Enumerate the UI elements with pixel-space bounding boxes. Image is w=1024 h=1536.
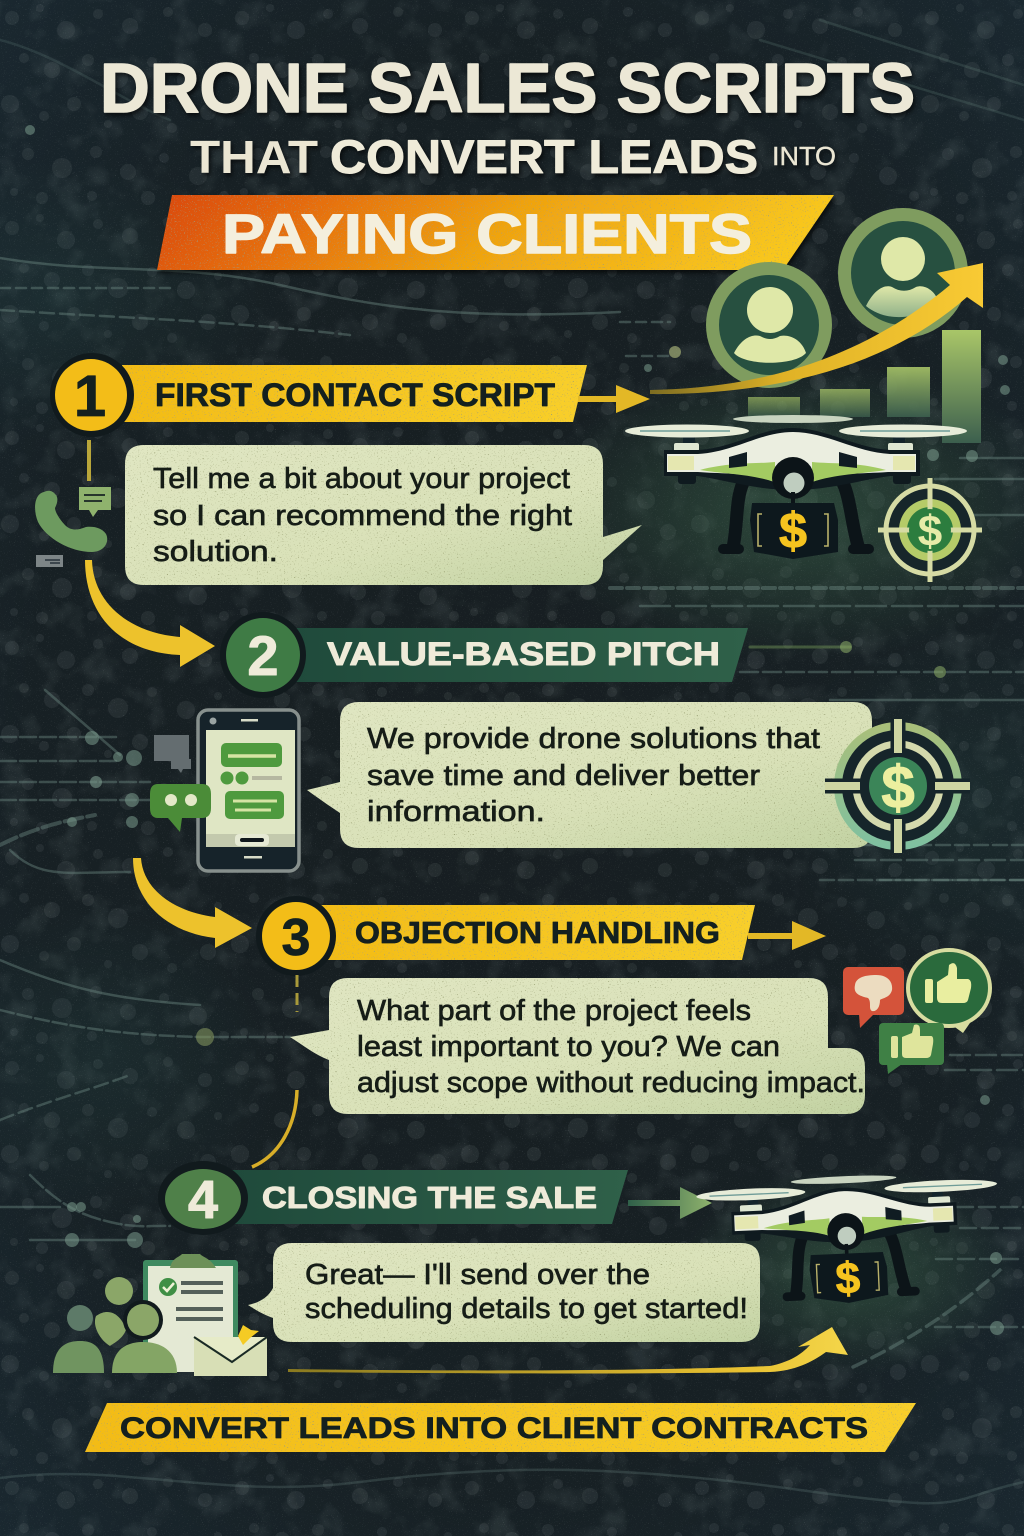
arrow: to client contracts bbox=[288, 1327, 848, 1374]
icon: thumbs up circle bbox=[908, 950, 990, 1033]
step 4 bbox=[158, 1161, 760, 1342]
icon: drone with dollar package bbox=[625, 415, 967, 559]
step 3 banner: OBJECTION HANDLING bbox=[355, 915, 720, 950]
step 3 banner bbox=[318, 905, 755, 960]
arrow: step 3 right bbox=[748, 921, 826, 950]
script bubble 4: scheduling details to get started! bbox=[305, 1293, 748, 1325]
title banner: paying clients: PAYING CLIENTS bbox=[222, 202, 752, 265]
icon: dollar target: $ bbox=[918, 507, 942, 556]
step 4 number badge: 4 bbox=[188, 1170, 218, 1230]
icon: green chat bubble bbox=[150, 784, 211, 832]
title banner: paying clients bbox=[157, 195, 834, 270]
step 1 banner bbox=[122, 365, 587, 422]
title line 2: CONVERT LEADS bbox=[330, 130, 758, 183]
script bubble 4: Great— I'll send over the bbox=[305, 1259, 650, 1291]
step 4 banner: CLOSING THE SALE bbox=[262, 1180, 597, 1215]
icon: dollar target bbox=[878, 478, 982, 582]
script bubble 3: adjust scope without reducing impact. bbox=[357, 1067, 865, 1099]
icon: feedback thumbs bbox=[843, 950, 990, 1074]
title bbox=[100, 49, 915, 270]
title line 2: THAT bbox=[190, 131, 318, 183]
step 2 banner bbox=[292, 628, 748, 682]
arrow: step 1 to step 2 bbox=[85, 560, 215, 667]
script bubble 2: save time and deliver better bbox=[367, 760, 760, 792]
icon: grey chat bubbles bbox=[154, 735, 191, 773]
icon: phone call bbox=[35, 487, 111, 567]
step 3 number badge: 3 bbox=[282, 909, 310, 967]
arrow: step 4 right bbox=[628, 1187, 712, 1219]
step 1 number badge bbox=[50, 353, 134, 437]
script bubble 1: solution. bbox=[153, 536, 278, 568]
icon: dollar target 2: $ bbox=[881, 754, 915, 821]
script bubble 2 bbox=[307, 702, 872, 848]
arrow: step 2 to step 3 bbox=[133, 858, 252, 948]
icon: drone with dollar package small bbox=[696, 1170, 1002, 1310]
arrow: growth trend bbox=[650, 263, 983, 394]
icon: smartphone with chat bbox=[150, 710, 299, 871]
script bubble 4 bbox=[248, 1243, 760, 1342]
title line 1: DRONE SALES SCRIPTS bbox=[100, 49, 915, 127]
connector line: step 1 to phone bbox=[87, 440, 91, 481]
step 1 banner: FIRST CONTACT SCRIPT bbox=[155, 377, 555, 413]
script bubble 1 bbox=[125, 445, 642, 585]
script bubble 3 bbox=[290, 978, 865, 1114]
script bubble 1: Tell me a bit about your project bbox=[153, 463, 570, 495]
step 4 number badge bbox=[158, 1161, 248, 1235]
step 1 number badge: 1 bbox=[74, 364, 106, 429]
bottom banner bbox=[85, 1403, 916, 1452]
step 4 banner bbox=[232, 1170, 628, 1224]
script bubble 2: We provide drone solutions that bbox=[367, 723, 820, 755]
step 3 bbox=[256, 896, 865, 1114]
icon: envelope bbox=[194, 1325, 267, 1376]
icon: thumbs down bubble bbox=[843, 967, 904, 1028]
step 2 number badge bbox=[220, 612, 306, 698]
icon: team, clipboard and email bbox=[53, 1254, 267, 1376]
icon: clipboard bbox=[143, 1254, 238, 1372]
step 2 bbox=[220, 612, 872, 848]
arrow: step 1 to drone bbox=[578, 385, 650, 413]
step 3 number badge bbox=[256, 896, 336, 976]
title line 2: INTO bbox=[772, 141, 836, 171]
icon: growth bars bbox=[748, 330, 981, 443]
script bubble 3: least important to you? We can bbox=[357, 1031, 780, 1063]
step 2 banner: VALUE-BASED PITCH bbox=[327, 636, 720, 672]
icon: team bbox=[53, 1277, 177, 1373]
script bubble 1: so I can recommend the right bbox=[153, 500, 572, 532]
icon: small green chat bbox=[79, 487, 111, 517]
icon: dollar target 2 bbox=[825, 719, 970, 853]
step 1 bbox=[50, 353, 650, 585]
title line 2 bbox=[190, 130, 836, 183]
connector line: step 2 to step 3 bubble bbox=[296, 975, 298, 1012]
icon: thumbs up bubble bbox=[879, 1023, 944, 1074]
icon: small grey chat bbox=[36, 555, 63, 567]
step 2 number badge: 2 bbox=[247, 624, 279, 687]
bottom banner: CONVERT LEADS INTO CLIENT CONTRACTS bbox=[120, 1412, 868, 1445]
script bubble 2: information. bbox=[367, 796, 545, 828]
icon: client avatars bbox=[706, 208, 968, 388]
connector: step 3 to step 4 bbox=[252, 1090, 297, 1167]
script bubble 3: What part of the project feels bbox=[357, 995, 751, 1027]
